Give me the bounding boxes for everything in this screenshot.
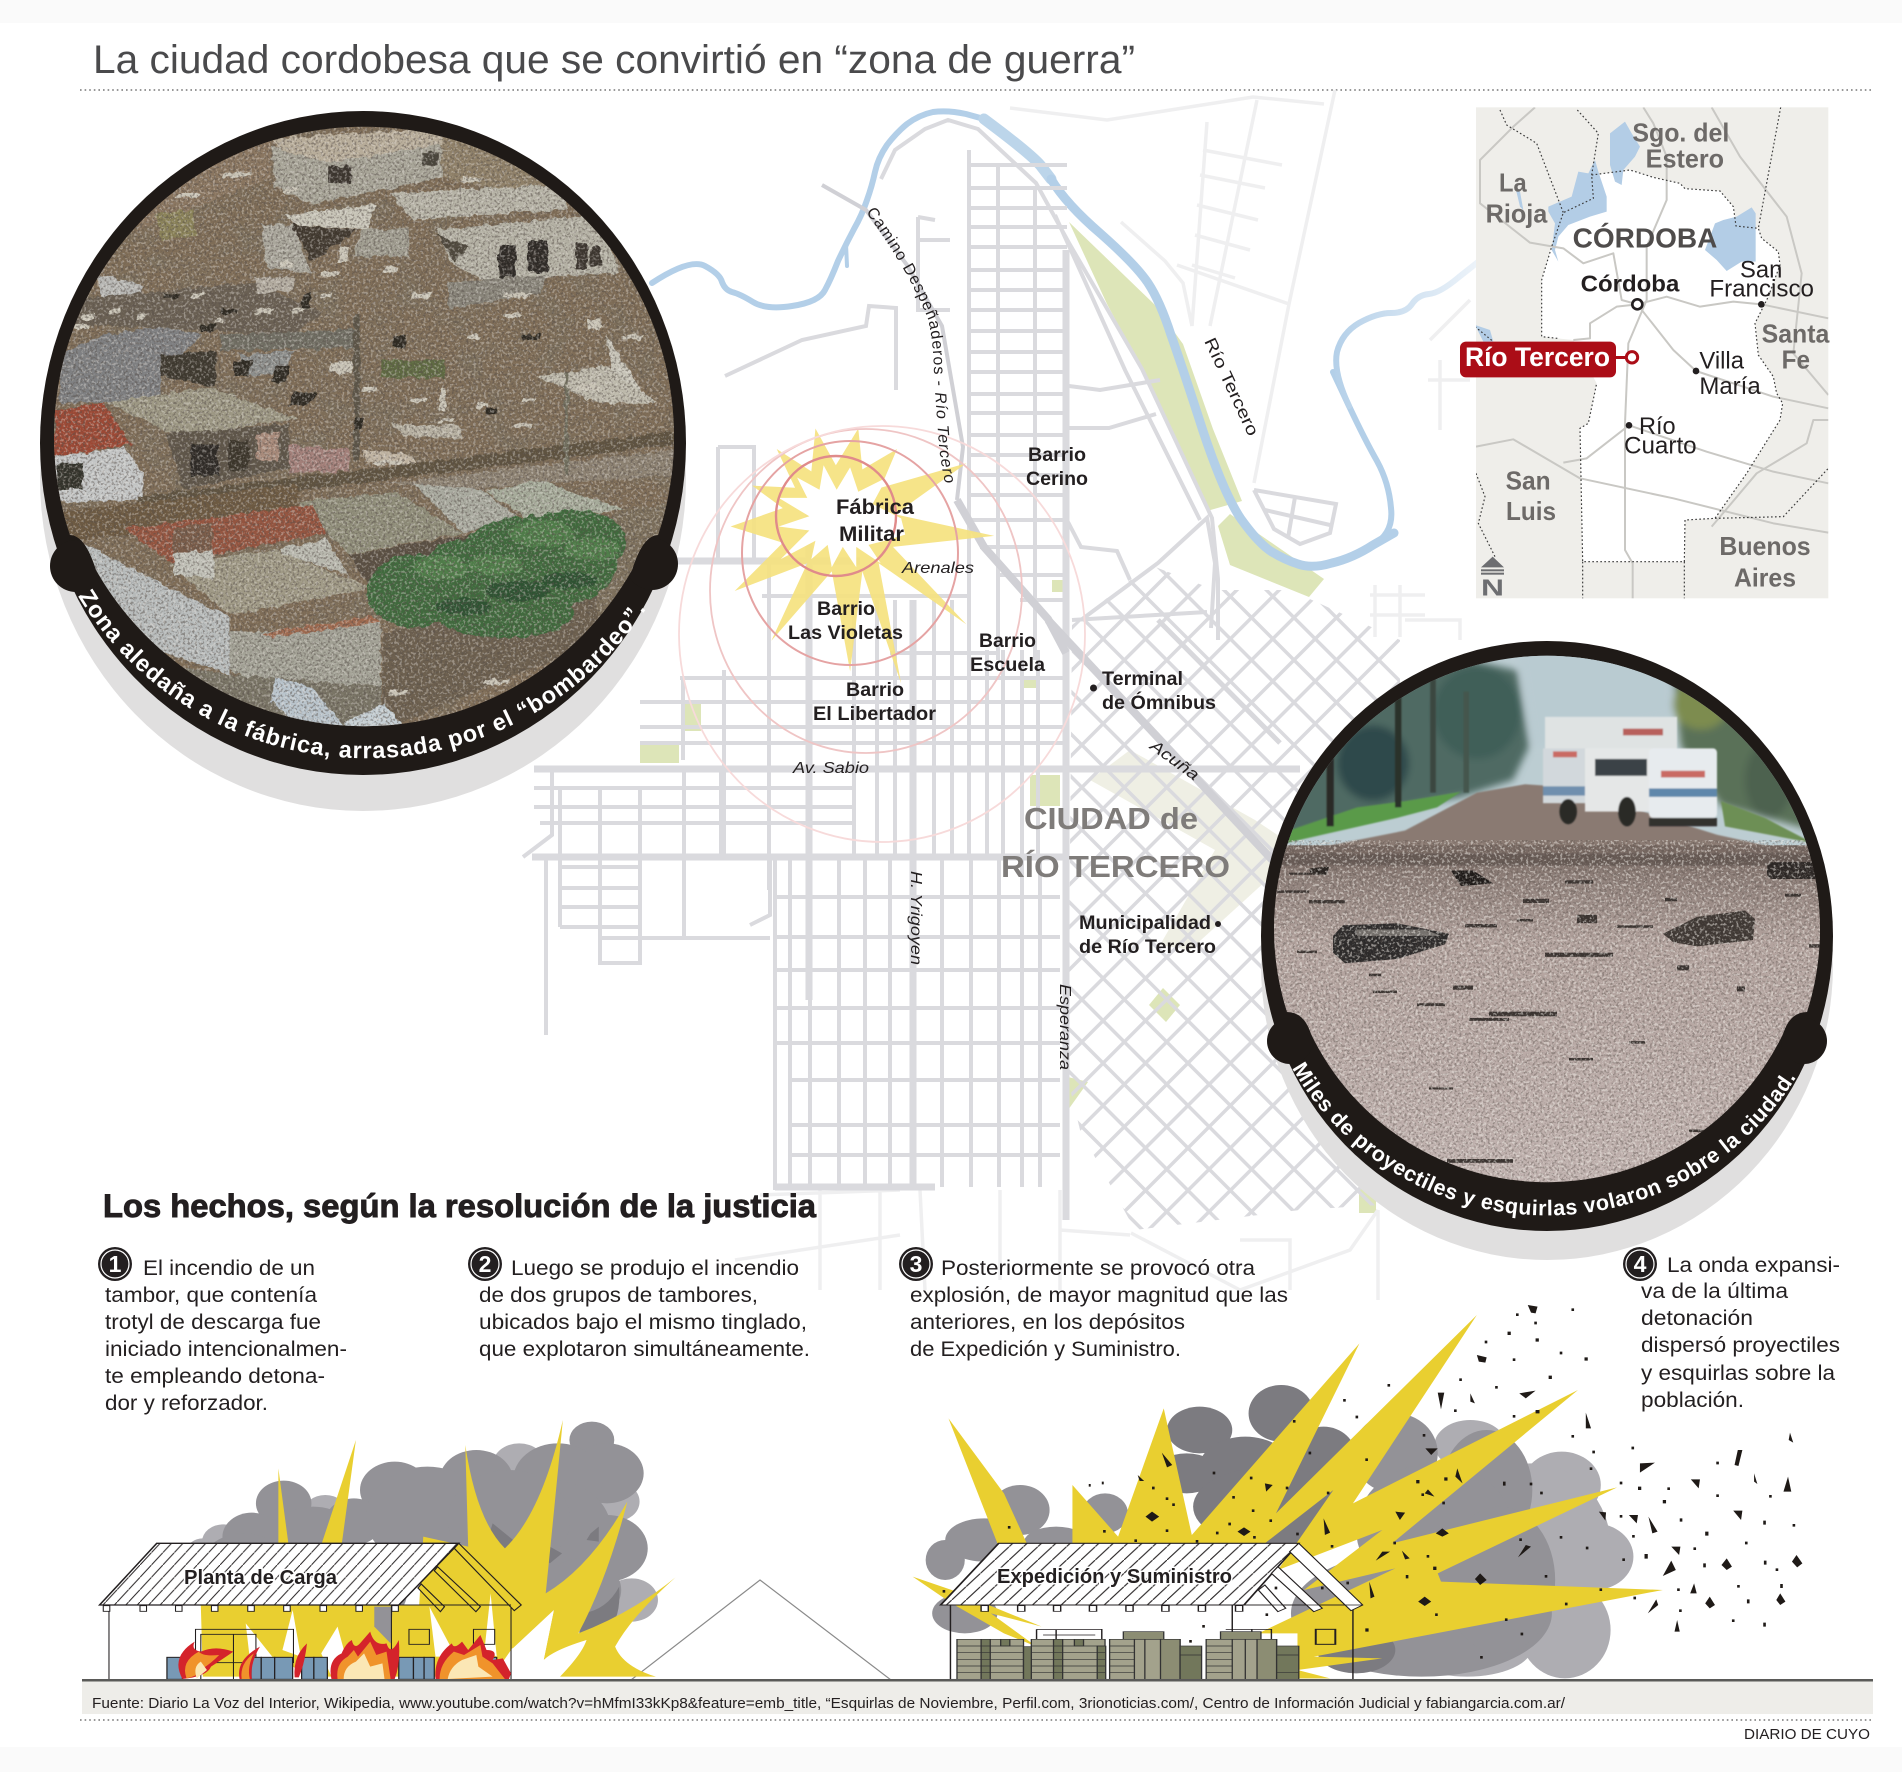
title: La ciudad cordobesa que se convirtió en “zona de guerra” bbox=[93, 38, 1135, 82]
fire bbox=[178, 1632, 511, 1679]
map labels: Camino Despeñaderos - Río Tercero bbox=[868, 208, 953, 482]
step 2: ubicados bajo el mismo tinglado, bbox=[479, 1311, 807, 1334]
map labels: H. Yrigoyen bbox=[907, 871, 924, 965]
inset: labels: Buenos bbox=[1719, 531, 1811, 561]
inset: labels: Río bbox=[1639, 413, 1676, 440]
inset: Río Tercero callout: Río Tercero bbox=[1465, 342, 1610, 372]
step 3: explosión, de mayor magnitud que las bbox=[910, 1284, 1288, 1307]
photo: razed area next to the factory bbox=[40, 111, 686, 811]
inset: labels: Rioja bbox=[1486, 199, 1548, 229]
map labels: Municipalidad bbox=[1079, 913, 1211, 934]
credit: DIARIO DE CUYO bbox=[1744, 1727, 1870, 1743]
van and truck bbox=[1543, 717, 1717, 826]
map labels: Barrio bbox=[979, 631, 1036, 652]
smoke bbox=[187, 1443, 658, 1622]
footer: sources: Fuente: Diario La Voz del Interior, Wikipedia, www.youtube.com/watch?v=hMfmI33kKp8&feature=emb_title, “Esquirlas de Noviembre, Perfil.com, 3rionoticias.com/, Centro de Información Judicial y fabiangarcia.com.ar/ bbox=[92, 1696, 1566, 1712]
photo: shells scattered on the street bbox=[1261, 641, 1833, 1260]
inset: city markers bbox=[1626, 299, 1765, 429]
map: parks bbox=[640, 222, 1376, 1213]
step 4: y esquirlas sobre la bbox=[1641, 1362, 1835, 1385]
building walls bbox=[109, 1605, 511, 1680]
step 2: 2 bbox=[479, 1251, 491, 1277]
map labels: Barrio bbox=[817, 599, 875, 620]
map labels: Río Tercero bbox=[1200, 335, 1262, 439]
crate stacks bbox=[957, 1632, 1299, 1679]
step 4: va de la última bbox=[1641, 1280, 1788, 1303]
step 4: detonación bbox=[1641, 1307, 1753, 1330]
step 3 bbox=[899, 1247, 1288, 1361]
map: diagonal street grid bbox=[1068, 565, 1400, 1230]
caption 1: Zona aledaña a la fábrica, arrasada por el “bombardeo”. bbox=[78, 588, 646, 760]
map: pale outer roads bbox=[735, 90, 1470, 1300]
map labels: Barrio bbox=[1028, 445, 1086, 466]
label: Planta de Carga: Planta de Carga bbox=[184, 1567, 338, 1589]
inset: labels: Santa bbox=[1762, 318, 1830, 348]
map labels: de Río Tercero bbox=[1079, 937, 1216, 958]
step 1: trotyl de descarga fue bbox=[105, 1311, 321, 1334]
map labels: Acuña bbox=[1146, 737, 1202, 784]
inset: labels: La bbox=[1499, 168, 1527, 198]
inset: labels: Luis bbox=[1506, 496, 1556, 526]
inset: labels: San bbox=[1506, 465, 1551, 495]
map labels bbox=[788, 208, 1302, 1076]
inset: labels: Francisco bbox=[1709, 276, 1814, 303]
step 3: anteriores, en los depósitos bbox=[910, 1311, 1185, 1334]
step 3: 3 bbox=[910, 1251, 922, 1277]
map: rivers bbox=[652, 111, 1478, 566]
inset: labels: Cuarto bbox=[1624, 432, 1697, 459]
inset: labels: Estero bbox=[1646, 143, 1724, 173]
barrels bbox=[167, 1657, 497, 1679]
map labels: RÍO TERCERO bbox=[1001, 849, 1230, 884]
inset: labels: San bbox=[1740, 257, 1782, 284]
inset: roads bbox=[1476, 107, 1828, 598]
map labels: Barrio bbox=[846, 680, 904, 701]
city street map bbox=[523, 90, 1478, 1300]
icon: north arrow bbox=[1481, 557, 1504, 601]
step 1 bbox=[98, 1247, 347, 1415]
inset: Río Tercero callout bbox=[1460, 342, 1638, 377]
inset: labels: Villa bbox=[1699, 348, 1745, 375]
step 2 bbox=[468, 1247, 810, 1361]
map: main roads bbox=[822, 185, 1280, 865]
inset: labels: Sgo. del bbox=[1632, 118, 1729, 148]
illustration: Planta de Carga burning bbox=[100, 1420, 676, 1680]
flames of the blast bbox=[278, 1468, 289, 1545]
map labels: Las Violetas bbox=[788, 623, 903, 644]
step 1: tambor, que contenía bbox=[105, 1284, 317, 1307]
inset: labels: Fe bbox=[1782, 344, 1810, 374]
map labels: Esperanza bbox=[1056, 984, 1073, 1070]
step 1: 1 bbox=[109, 1251, 122, 1277]
blast zone bbox=[679, 426, 1085, 842]
section heading: Los hechos, según la resolución de la justicia bbox=[103, 1188, 816, 1224]
inset: labels: Córdoba bbox=[1581, 271, 1680, 297]
blast flames bbox=[913, 1315, 1663, 1678]
step 4 bbox=[1623, 1247, 1840, 1412]
step 3: de Expedición y Suministro. bbox=[910, 1338, 1181, 1361]
map labels: Terminal bbox=[1102, 669, 1183, 690]
map labels: Militar bbox=[839, 523, 904, 546]
caption 2: Miles de proyectiles y esquirlas volaron sobre la ciudad. bbox=[1292, 1062, 1796, 1218]
shrapnel bbox=[943, 1305, 1802, 1659]
step 4: 4 bbox=[1634, 1251, 1647, 1277]
inset: lakes bbox=[1475, 122, 1756, 342]
blast: radius rings bbox=[679, 426, 1085, 842]
blast: star bbox=[731, 429, 994, 684]
inset: labels bbox=[1486, 118, 1830, 593]
step 2: que explotaron simultáneamente. bbox=[479, 1338, 810, 1361]
step 1: El incendio de un bbox=[143, 1257, 315, 1280]
step 2: de dos grupos de tambores, bbox=[479, 1284, 758, 1307]
map labels: El Libertador bbox=[813, 704, 937, 725]
smoke bbox=[1435, 1420, 1634, 1678]
map labels: Av. Sabio bbox=[792, 760, 869, 777]
inset: labels: María bbox=[1699, 373, 1761, 400]
roof bbox=[100, 1543, 459, 1605]
map labels: Arenales bbox=[901, 560, 974, 577]
step 4: dispersó proyectiles bbox=[1641, 1334, 1840, 1357]
step 1: dor y reforzador. bbox=[105, 1392, 268, 1415]
map labels: Escuela bbox=[970, 655, 1045, 676]
step 4: La onda expansi- bbox=[1667, 1254, 1840, 1277]
inset locator map bbox=[1460, 107, 1830, 601]
map labels: de Ómnibus bbox=[1102, 692, 1216, 714]
step 1: iniciado intencionalmen- bbox=[105, 1338, 347, 1361]
step 2: Luego se produjo el incendio bbox=[511, 1257, 799, 1280]
inset: Córdoba province bbox=[1542, 170, 1783, 562]
roof bbox=[941, 1543, 1299, 1605]
map labels: Cerino bbox=[1026, 469, 1088, 490]
step 3: Posteriormente se provocó otra bbox=[941, 1257, 1255, 1280]
map labels: Fábrica bbox=[836, 496, 914, 519]
inset: labels: CÓRDOBA bbox=[1573, 222, 1717, 253]
map labels: CIUDAD de bbox=[1024, 801, 1198, 836]
label: Expedición y Suministro: Expedición y Suministro bbox=[997, 1566, 1232, 1588]
mountain outline bbox=[631, 1580, 891, 1680]
building walls bbox=[950, 1605, 1353, 1679]
step 4: población. bbox=[1641, 1389, 1744, 1412]
map: west and central streets bbox=[725, 120, 1218, 640]
inset: labels: Aires bbox=[1734, 563, 1796, 593]
icon: north arrow: N bbox=[1481, 575, 1504, 601]
illustration: Expedición y Suministro exploding bbox=[913, 1305, 1802, 1679]
step 1: te empleando detona- bbox=[105, 1365, 325, 1388]
footer: sources bbox=[82, 1679, 1873, 1714]
inset: borders bbox=[1475, 107, 1828, 598]
